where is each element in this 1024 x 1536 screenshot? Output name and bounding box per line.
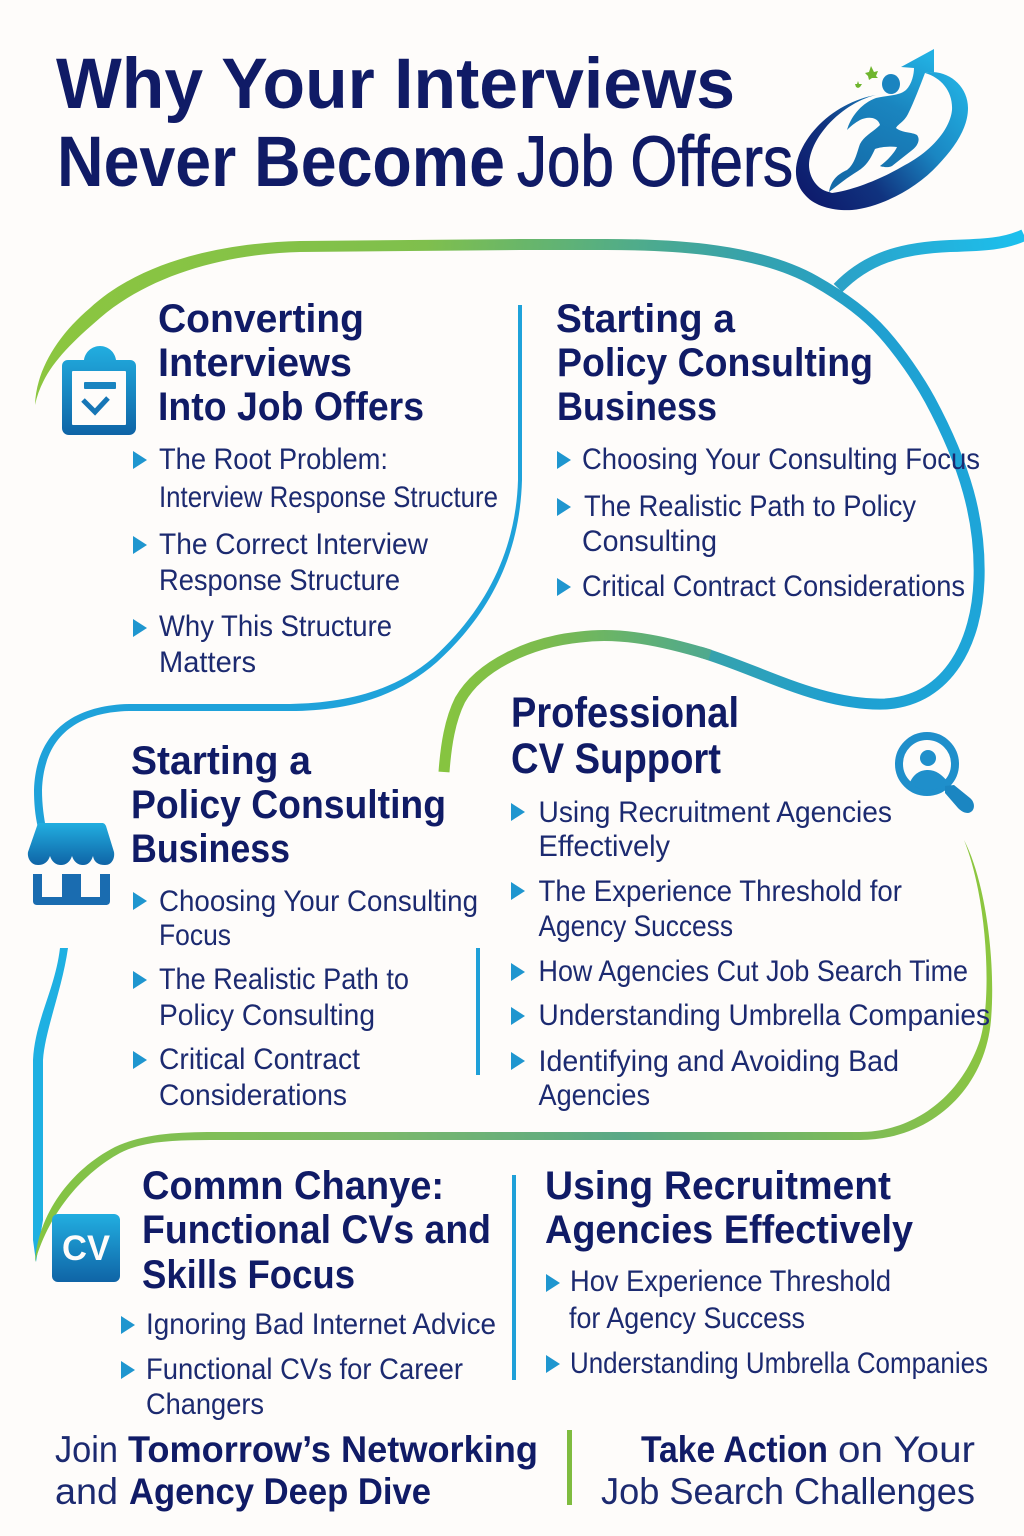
heading: using recruitment agencies effectively: Using Recruitment [545, 1164, 891, 1208]
bullet list: The Realistic Path to [159, 963, 409, 996]
heading: starting a policy consulting business: Policy Consulting [557, 341, 873, 385]
heading: using recruitment agencies effectively [545, 1164, 914, 1252]
connector: lower green route [35, 840, 992, 1262]
bullet list: Policy Consulting [159, 999, 375, 1032]
heading: professional cv support: Professional [511, 689, 739, 737]
bullet list [133, 443, 498, 679]
footer: join tomorrow's networking: and [55, 1471, 118, 1512]
title: Job Offers [517, 123, 793, 202]
bullet list: Hov Experience Threshold [570, 1265, 891, 1298]
bullet list: Matters [159, 646, 256, 679]
heading: using recruitment agencies effectively: Agencies Effectively [545, 1208, 914, 1252]
heading: starting a policy consulting business [556, 297, 873, 429]
heading: starting a policy consulting business: Business [131, 827, 290, 871]
connector: left route [34, 305, 522, 828]
heading: converting interviews: Into Job Offers [158, 385, 424, 429]
bullet list: The Realistic Path to Policy [584, 490, 916, 523]
heading: converting interviews [158, 297, 424, 429]
heading: starting a policy consulting business: Business [557, 385, 717, 429]
connector: lower left blue [33, 948, 68, 1262]
heading: converting interviews: Interviews [158, 341, 352, 385]
footer: join tomorrow's networking [55, 1429, 538, 1512]
title [56, 45, 793, 202]
bullet list: The Correct Interview [159, 528, 428, 561]
heading: common change functional cvs: Commn Chanye: [142, 1164, 444, 1208]
panel: common change functional cvs [121, 1164, 496, 1421]
bullet list: Consulting [582, 525, 717, 558]
heading: common change functional cvs [142, 1164, 491, 1297]
bullet list: Focus [159, 919, 231, 952]
bullet list: Ignoring Bad Internet Advice [146, 1308, 496, 1341]
bullet list: Interview Response Structure [159, 481, 498, 514]
bullet list: The Root Problem: [159, 443, 388, 476]
bullet list [133, 885, 478, 1112]
heading: starting a policy consulting business: Policy Consulting [131, 783, 446, 827]
title: Why Your Interviews [56, 45, 735, 124]
footer: take action [601, 1429, 975, 1512]
panel: starting a policy consulting business (middle left) [131, 739, 478, 1112]
bullet list: Critical Contract Considerations [582, 570, 965, 603]
heading: starting a policy consulting business: Starting a [556, 297, 736, 341]
bullet list: Identifying and Avoiding Bad [538, 1045, 899, 1078]
bullet list: Using Recruitment Agencies [538, 796, 892, 829]
bullet list: Agencies [538, 1079, 650, 1112]
bullet list: The Experience Threshold for [538, 875, 902, 908]
heading: starting a policy consulting business: Starting a [131, 739, 312, 783]
panel: converting interviews [133, 297, 498, 679]
icon: magnifying glass with person [899, 736, 974, 813]
bullet list: How Agencies Cut Job Search Time [538, 955, 968, 988]
bullet list [511, 796, 990, 1112]
bullet list [557, 443, 980, 603]
connector: top route [35, 235, 1024, 772]
bullet list: Agency Success [538, 910, 733, 943]
heading: professional cv support: CV Support [511, 735, 721, 783]
panel: professional cv support [511, 689, 990, 1112]
heading: common change functional cvs: Functional CVs and [142, 1208, 491, 1252]
footer: join tomorrow's networking: Tomorrow’s Networking [128, 1429, 538, 1470]
heading: converting interviews: Converting [158, 297, 364, 341]
footer: take action: Job Search Challenges [601, 1471, 975, 1512]
bullet list: Changers [146, 1388, 264, 1421]
bullet list: Considerations [159, 1079, 347, 1112]
bullet list [121, 1308, 496, 1421]
bullet list: Effectively [538, 830, 670, 863]
footer: take action: on Your [838, 1429, 975, 1470]
footer: join tomorrow's networking: Agency Deep Dive [129, 1471, 431, 1512]
bullet list [546, 1265, 988, 1380]
heading: starting a policy consulting business [131, 739, 446, 871]
footer: take action: Take Action [641, 1429, 828, 1470]
heading: common change functional cvs: Skills Focus [142, 1253, 355, 1297]
bullet list: Functional CVs for Career [146, 1353, 463, 1386]
bullet list: Understanding Umbrella Companies [538, 999, 990, 1032]
bullet list: Choosing Your Consulting Focus [582, 443, 980, 476]
bullet list: for Agency Success [569, 1302, 805, 1335]
bullet list: Critical Contract [159, 1043, 361, 1076]
panel: starting a policy consulting business (top right) [556, 297, 980, 603]
icon: cv badge: CV [62, 1229, 111, 1268]
bullet list: Response Structure [159, 564, 400, 597]
bullet list: Why This Structure [159, 610, 392, 643]
icon: storefront [28, 823, 114, 905]
logo: running figure with arrow ring [796, 49, 968, 210]
heading: professional cv support [511, 689, 739, 783]
panel: using recruitment agencies effectively [545, 1164, 988, 1380]
footer: join tomorrow's networking: Join [55, 1429, 118, 1470]
icon: cv badge [52, 1214, 120, 1282]
title: Never Become [57, 123, 505, 202]
icon: clipboard [62, 346, 136, 435]
bullet list: Choosing Your Consulting [159, 885, 478, 918]
